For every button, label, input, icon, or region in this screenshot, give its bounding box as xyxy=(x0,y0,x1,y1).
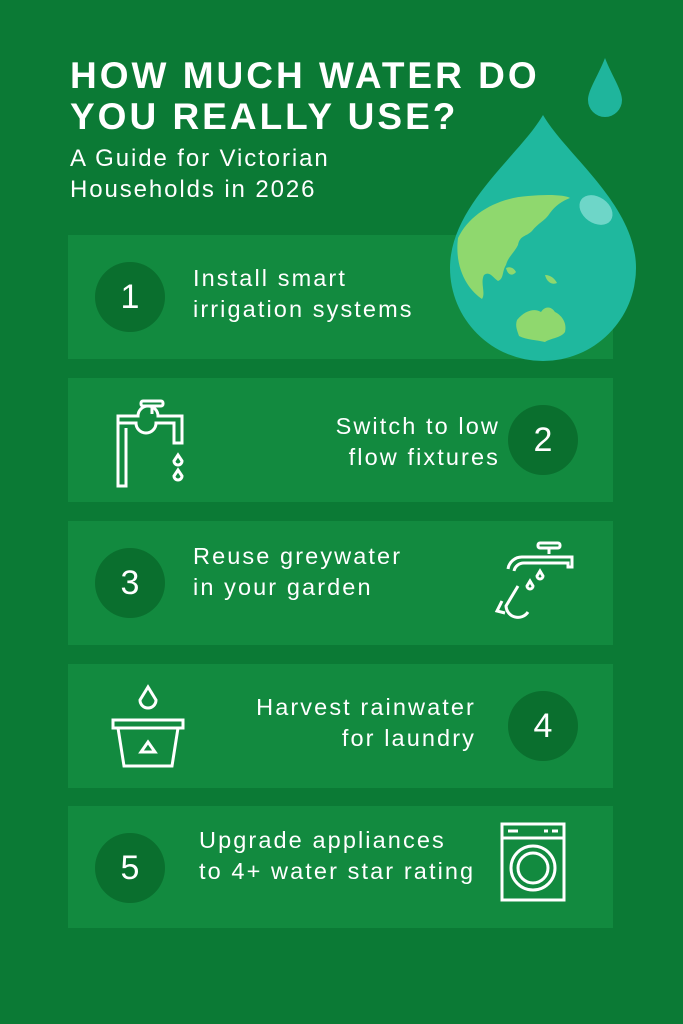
text 1 xyxy=(193,265,414,322)
icon: tap xyxy=(116,400,184,488)
illustration: earth water drop xyxy=(450,58,636,361)
icon: greywater tap xyxy=(494,542,574,619)
subtitle xyxy=(70,145,330,203)
title: HOW MUCH WATER DO xyxy=(70,55,540,96)
number 4: 4 xyxy=(534,707,552,745)
text 3: Reuse greywater xyxy=(193,543,402,569)
number 1 xyxy=(95,262,165,332)
panel 5 xyxy=(68,806,613,928)
number 3 xyxy=(95,548,165,618)
text 3: in your garden xyxy=(193,574,373,600)
text 5: to 4+ water star rating xyxy=(199,858,475,884)
text 4: for laundry xyxy=(342,725,476,751)
subtitle: A Guide for Victorian xyxy=(70,145,330,172)
subtitle: Households in 2026 xyxy=(70,176,316,203)
panel 2 xyxy=(68,378,613,502)
text 4 xyxy=(256,694,476,751)
text 2: Switch to low xyxy=(336,413,500,439)
text 3 xyxy=(193,543,402,600)
text 2: flow fixtures xyxy=(349,444,500,470)
number 1: 1 xyxy=(121,278,139,316)
text 1: irrigation systems xyxy=(193,296,414,322)
number 5: 5 xyxy=(121,849,139,887)
number 2 xyxy=(508,405,578,475)
icon: washing machine xyxy=(500,822,566,902)
icon: rain basket xyxy=(112,684,184,768)
number 5 xyxy=(95,833,165,903)
panel 4 xyxy=(68,664,613,788)
panel 3 xyxy=(68,521,613,645)
number 2: 2 xyxy=(534,421,552,459)
number 3: 3 xyxy=(121,564,139,602)
big drop xyxy=(450,115,636,361)
small drop xyxy=(588,58,622,117)
text 1: Install smart xyxy=(193,265,347,291)
text 4: Harvest rainwater xyxy=(256,694,476,720)
title xyxy=(70,55,540,137)
text 2 xyxy=(336,413,500,470)
title: YOU REALLY USE? xyxy=(70,96,458,137)
text 5: Upgrade appliances xyxy=(199,827,446,853)
panel 1 xyxy=(68,235,613,359)
text 5 xyxy=(199,827,475,884)
number 4 xyxy=(508,691,578,761)
